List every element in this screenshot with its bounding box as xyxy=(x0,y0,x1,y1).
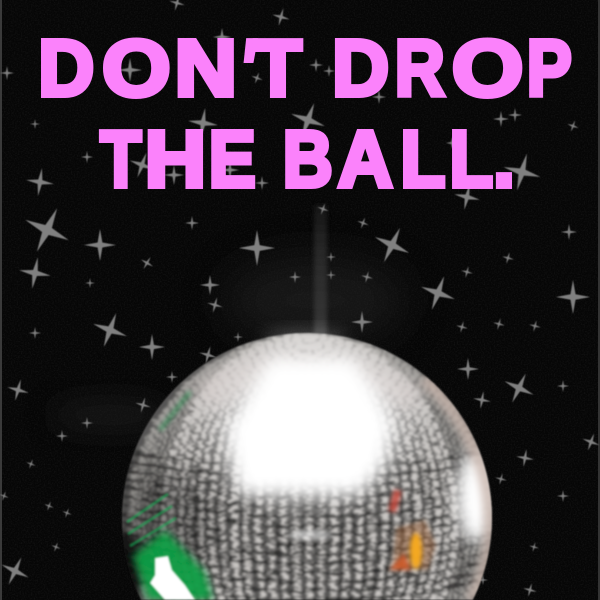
title line 1: D xyxy=(38,24,94,112)
white glare in green xyxy=(150,556,195,600)
title line 2: L xyxy=(400,114,445,204)
main highlight xyxy=(226,358,394,495)
orange reflection xyxy=(389,520,436,570)
title line 2: B xyxy=(283,114,333,204)
title line 2: T xyxy=(100,114,141,204)
left darkening xyxy=(130,470,210,590)
ball base xyxy=(120,333,494,600)
title line 2: . xyxy=(493,114,515,204)
title line 1: N xyxy=(174,24,237,112)
outer mirror columns xyxy=(128,333,486,600)
title line 1: O xyxy=(452,24,523,112)
title line 1: D xyxy=(332,24,389,112)
top rim glow xyxy=(190,353,425,412)
green upper rim xyxy=(160,392,190,430)
green reflection xyxy=(133,530,213,600)
title line 1: O xyxy=(102,24,171,112)
mirror columns xyxy=(161,333,453,600)
light beam and haze xyxy=(50,205,405,431)
title line 1: R xyxy=(395,24,445,112)
title line 2: E xyxy=(209,114,256,204)
green rim stripes xyxy=(127,494,176,546)
left shadow xyxy=(112,531,144,599)
title line 2: A xyxy=(338,114,393,204)
disco ball xyxy=(112,333,496,600)
mirror rows xyxy=(120,449,495,598)
mirror texture xyxy=(120,333,495,600)
highlight halo xyxy=(205,340,415,510)
right rim tint xyxy=(425,378,490,600)
title line 1: P xyxy=(527,24,572,112)
title xyxy=(38,24,572,204)
lower band glint xyxy=(288,530,332,540)
right highlight xyxy=(456,451,496,543)
title line 1: T xyxy=(254,24,302,112)
title line 2: L xyxy=(450,114,493,204)
red reflection xyxy=(388,489,402,513)
title line 2: H xyxy=(145,114,206,204)
title line 1: ' xyxy=(240,24,256,112)
top bloom xyxy=(263,329,347,347)
